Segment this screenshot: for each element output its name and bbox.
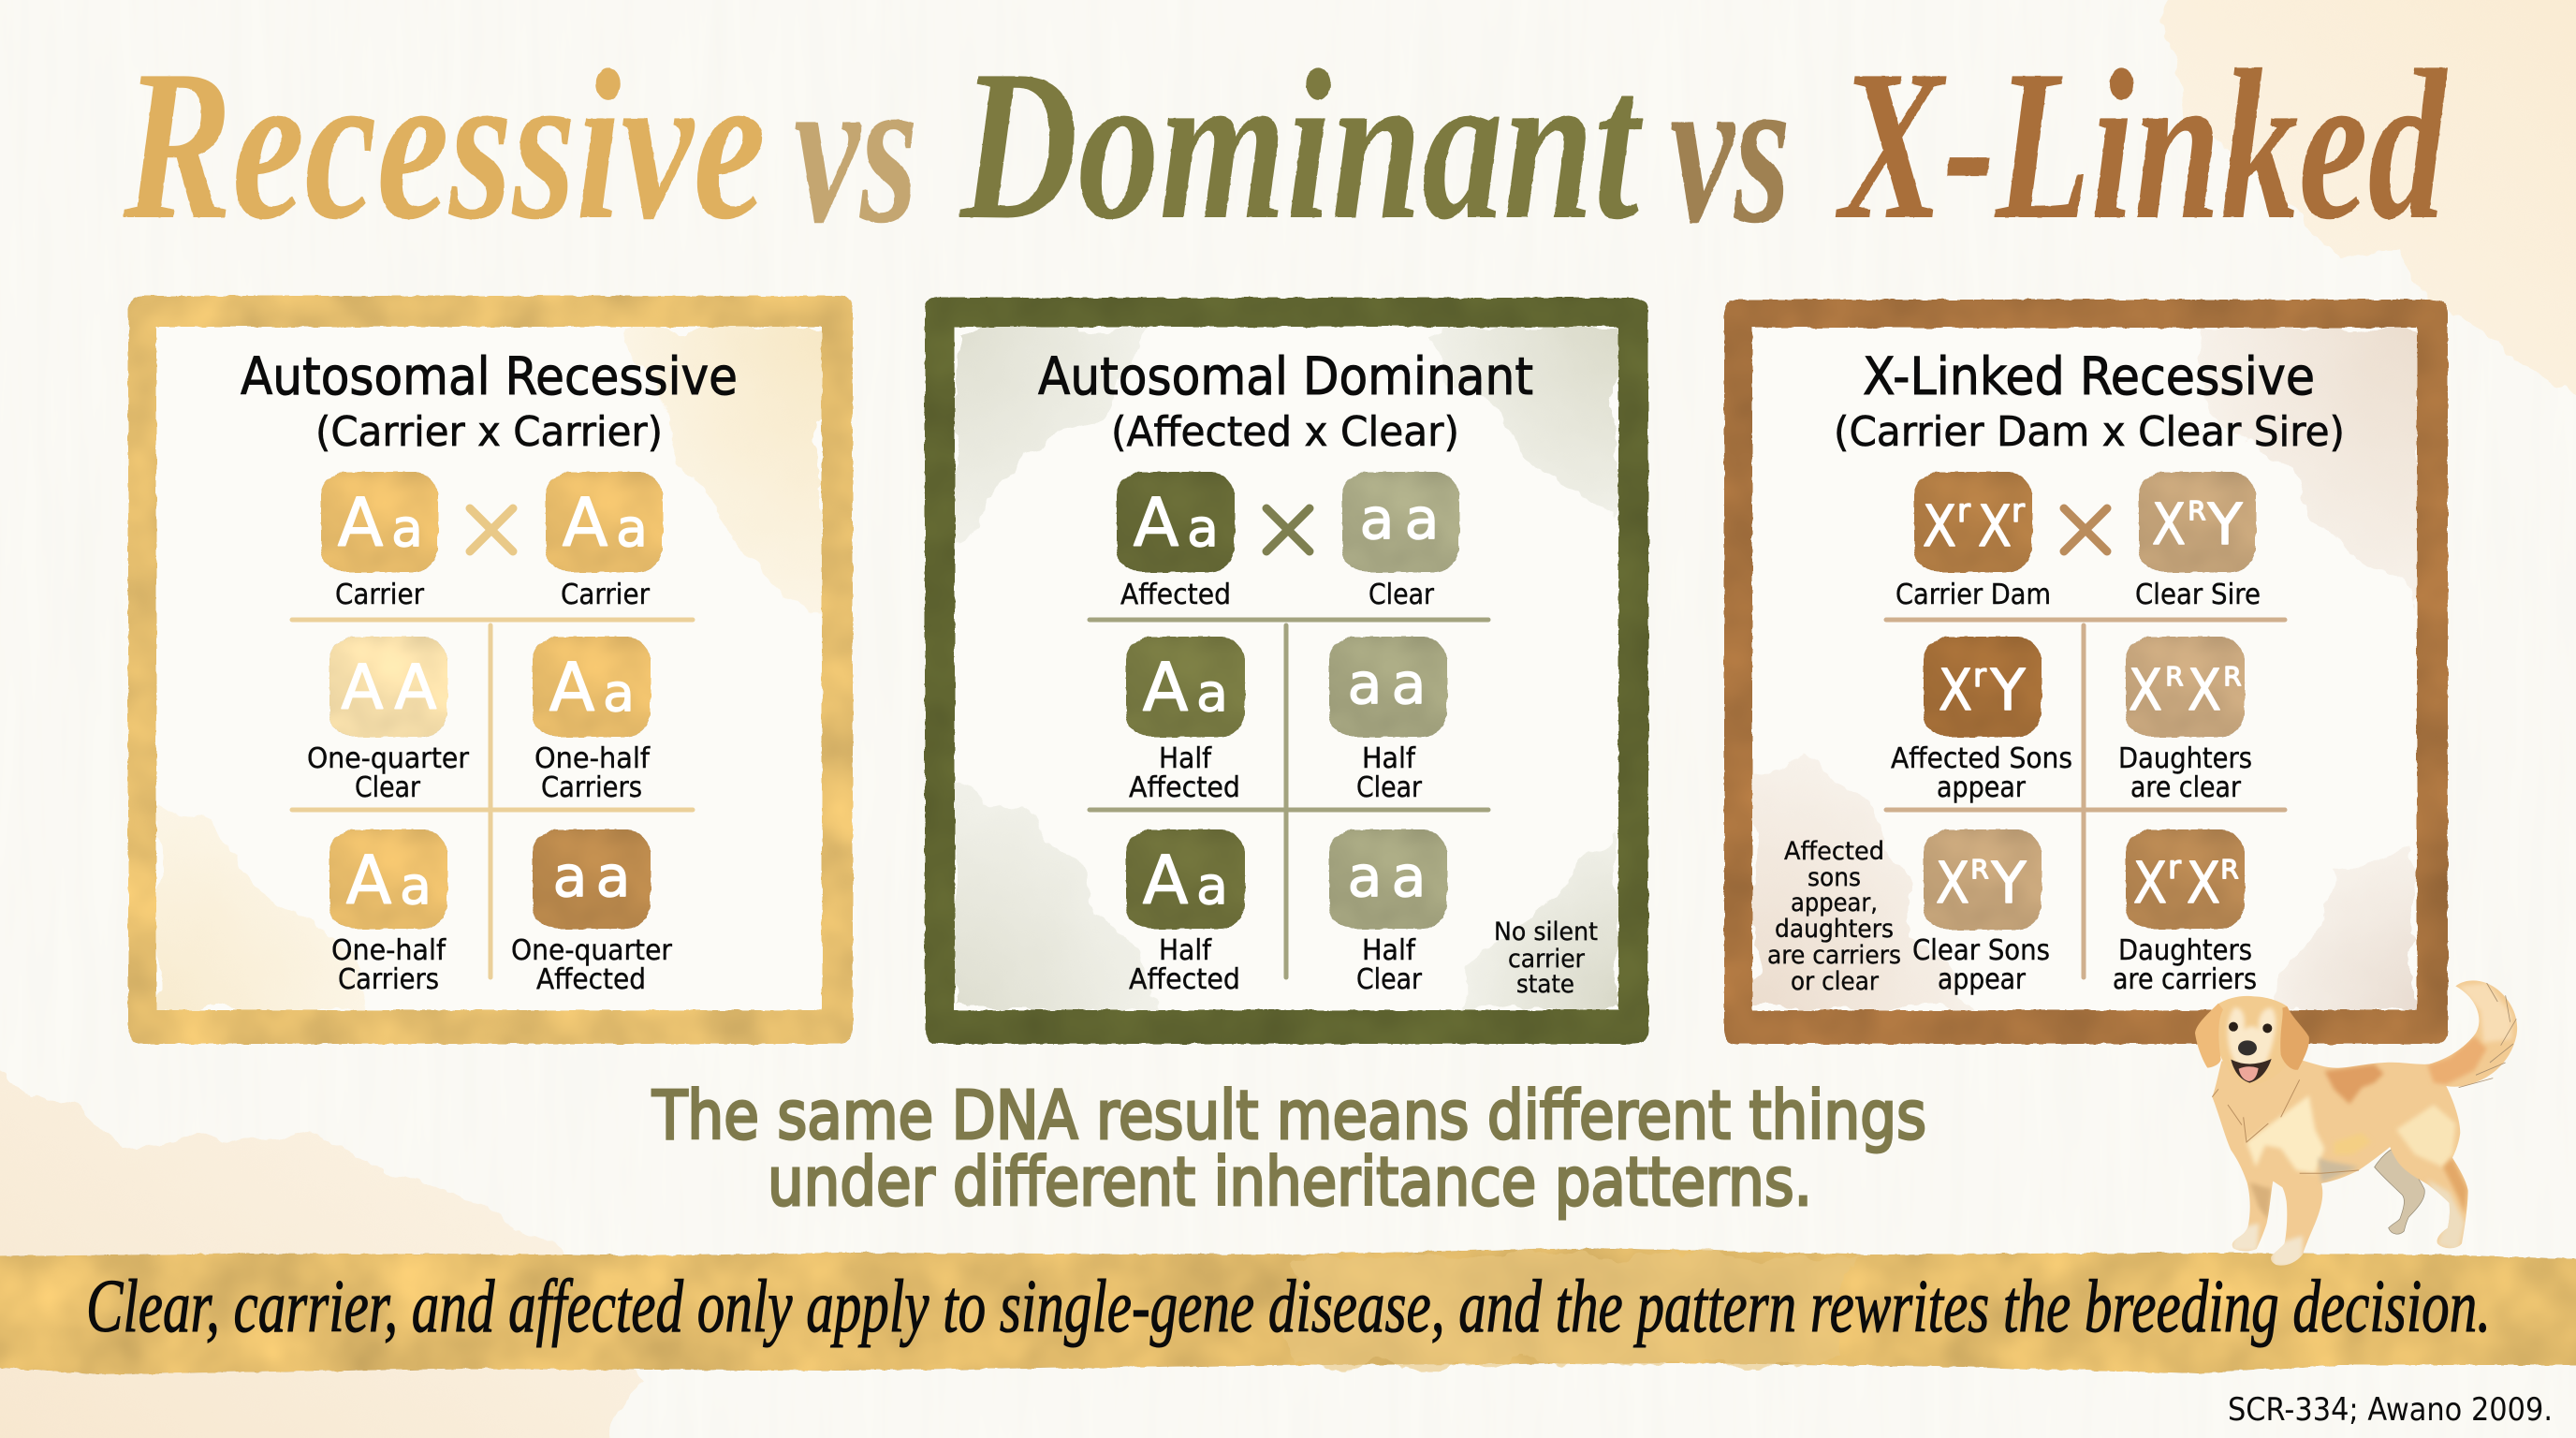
watercolour wash: bottom left [0, 1053, 637, 1438]
label: clear: Clear [1368, 579, 1435, 611]
tile: AA: A [394, 652, 437, 724]
label: carrier: Carrier [561, 579, 651, 611]
label: clear sire: Clear Sire [2135, 579, 2261, 611]
heading: Autosomal Recessive [241, 346, 738, 406]
heading: X-Linked Recessive [1863, 346, 2315, 406]
subheading: (Carrier x Carrier) [315, 408, 663, 456]
tile: parent XrXr: X [1978, 493, 2012, 560]
label: affected sons appear [1891, 742, 2072, 804]
right ear [2280, 1006, 2309, 1070]
tile: parent XRY: Y [2206, 492, 2243, 558]
panel: autosomal dominant [925, 298, 1648, 1044]
chest fur lines [2212, 1079, 2359, 1173]
tile: XrY [1924, 637, 2042, 737]
label: one-quarter affected: Affected [536, 963, 646, 996]
tile: Aa: A [1143, 842, 1188, 919]
title [123, 25, 2448, 268]
label: one-quarter affected: One-quarter [511, 934, 673, 967]
note: no silent carrier state: No silent [1494, 917, 1598, 946]
note: affected sons appear, daughters are carriers or clear: daughters [1775, 915, 1894, 944]
tile: Aa: a [1196, 856, 1228, 916]
tile: Aa: A [1143, 649, 1188, 726]
label: half clear: Clear [1356, 771, 1423, 804]
tile: XRXR: X [2188, 657, 2221, 724]
rump cream [2396, 1105, 2455, 1167]
label: half affected: Half [1159, 934, 1212, 967]
panel wash tints [156, 327, 822, 1010]
tile: XrY: r [1973, 657, 1986, 695]
tile: Aa [329, 829, 447, 929]
mouth [2231, 1059, 2272, 1083]
icon: cross [1266, 508, 1310, 551]
nose [2238, 1040, 2257, 1055]
subheading: (Carrier Dam x Clear Sire) [1834, 408, 2345, 456]
label: one-half carriers: Carriers [338, 963, 439, 996]
far hind leg [2375, 1149, 2424, 1234]
panel: autosomal recessive [128, 296, 853, 1044]
tile: XRXR [2126, 637, 2245, 737]
belly shadow [2319, 1158, 2359, 1182]
tile: Aa: A [549, 649, 594, 726]
tile: XrXR: r [2168, 849, 2181, 887]
label: daughters are clear [2118, 742, 2252, 804]
label: one-quarter affected [511, 934, 673, 996]
panel: x-linked recessive [1724, 300, 2448, 1044]
tile: parent Aa: a [1187, 498, 1219, 558]
label: one-half carriers [331, 934, 446, 996]
tile: Aa: A [346, 842, 391, 919]
icon: golden retriever [2195, 980, 2517, 1267]
head [2216, 996, 2296, 1086]
eyes [2229, 1022, 2272, 1033]
note: affected sons appear, daughters are carriers or clear [1767, 837, 1901, 996]
label: half affected [1129, 742, 1240, 804]
label: one-quarter clear [307, 742, 470, 804]
icon: cross [2064, 508, 2107, 551]
tail feather strokes [2459, 983, 2516, 1088]
belly glow [2334, 1133, 2371, 1154]
label: daughters are carriers: Daughters [2118, 934, 2252, 967]
tile: Aa [533, 637, 651, 737]
label: affected sons appear: Affected Sons [1891, 742, 2072, 775]
label: carrier: Carrier [335, 579, 425, 611]
frame [128, 296, 853, 1044]
label: half clear [1356, 934, 1423, 996]
subheading: (Affected x Clear) [1111, 408, 1459, 456]
tile: Aa [1126, 637, 1245, 737]
tile: aa [533, 829, 651, 929]
punnett grid lines [1090, 620, 1488, 977]
bottom banner band [0, 1248, 2576, 1374]
note: affected sons appear, daughters are carriers or clear: Affected [1784, 837, 1884, 866]
label: half clear: Half [1362, 742, 1416, 775]
note: affected sons appear, daughters are carriers or clear: are carriers [1767, 941, 1901, 970]
tile: aa: a [1392, 652, 1426, 717]
title: Recessive [123, 25, 766, 264]
tile: parent aa: a [1405, 487, 1439, 552]
tile: XRXR: X [2129, 657, 2162, 724]
heading: Autosomal Dominant [1038, 346, 1533, 406]
tile: parent XrXr: X [1923, 493, 1956, 560]
watercolour wash: top right [2162, 0, 2576, 412]
label: carrier dam: Carrier Dam [1895, 579, 2051, 611]
label: half clear [1356, 742, 1423, 804]
statement: same dna result [651, 1077, 1926, 1221]
title: Dominant [959, 25, 1644, 264]
frame [1724, 300, 2448, 1044]
tile: parent Aa: a [616, 498, 648, 558]
tile: AA [329, 637, 447, 737]
tile: parent XRY [2139, 472, 2256, 572]
tail shading [2427, 1036, 2487, 1084]
tile: XrY: X [1939, 657, 1972, 724]
tile: XRXR: R [2165, 661, 2184, 692]
label: half clear: Half [1362, 934, 1416, 967]
body colour patches [2231, 983, 2511, 1267]
panel wash tints [1752, 328, 2417, 1010]
label: clear sons appear: appear [1938, 963, 2027, 996]
tile: Aa: a [603, 663, 635, 723]
statement: same dna result: The same DNA result means different things [651, 1077, 1926, 1154]
label: affected sons appear: appear [1937, 771, 2027, 804]
tongue [2239, 1066, 2259, 1081]
note: no silent carrier state: carrier [1508, 945, 1586, 974]
left ear [2195, 1004, 2223, 1068]
tile: parent XRY: X [2152, 492, 2186, 558]
front paws pale [2231, 1224, 2303, 1267]
tile: parent Aa: A [563, 484, 607, 562]
tile: XRY: Y [1990, 850, 2027, 917]
body [2212, 980, 2517, 1266]
tile: parent aa [1342, 472, 1459, 572]
label: one-half carriers: Carriers [541, 771, 642, 804]
label: daughters are clear: are clear [2130, 771, 2242, 804]
tile: parent Aa [321, 472, 438, 572]
title: vs [794, 29, 918, 268]
tile: XRY: R [1970, 854, 1989, 885]
tile: parent XrXr: r [2012, 492, 2025, 530]
hind leg pale [2427, 1180, 2465, 1252]
tile: parent XrXr [1914, 472, 2032, 572]
tile: XRY [1924, 829, 2042, 930]
tile: Aa [1126, 829, 1245, 929]
tile: parent Aa [546, 472, 663, 572]
tile: XrXR: X [2133, 850, 2167, 917]
tile: parent aa: a [1360, 487, 1394, 552]
tile: aa [1329, 637, 1447, 737]
tile: aa: a [553, 844, 587, 910]
tile: parent Aa [1117, 472, 1235, 572]
icon: cross [470, 508, 513, 551]
label: daughters are clear: Daughters [2118, 742, 2252, 775]
head highlight [2228, 1007, 2276, 1072]
label: daughters are carriers: are carriers [2113, 963, 2257, 996]
note: affected sons appear, daughters are carriers or clear: sons [1808, 863, 1861, 892]
note: no silent carrier state: state [1516, 970, 1574, 999]
tile: aa: a [596, 844, 630, 910]
note: affected sons appear, daughters are carriers or clear: appear, [1791, 888, 1878, 917]
label: half affected: Affected [1129, 963, 1240, 996]
tile: XrXR: R [2220, 854, 2239, 885]
label: half clear: Clear [1356, 963, 1423, 996]
tile: XRY: X [1936, 850, 1969, 917]
label: affected: Affected [1120, 579, 1231, 611]
back patch [2324, 1064, 2384, 1104]
tile: XrY: Y [1989, 657, 2026, 724]
label: one-half carriers: One-half [534, 742, 651, 775]
title: vs [1670, 29, 1791, 268]
tile: parent Aa: A [338, 484, 383, 562]
tile: parent Aa: A [1134, 484, 1178, 562]
label: one-half carriers [534, 742, 651, 804]
banner lighter wash [1288, 1253, 1863, 1365]
label: half affected: Half [1159, 742, 1212, 775]
tile: parent Aa: a [391, 498, 423, 558]
label: one-quarter clear: Clear [355, 771, 421, 804]
tile: Aa: a [1196, 663, 1228, 723]
statement: same dna result: under different inheritance patterns. [768, 1143, 1812, 1221]
note: affected sons appear, daughters are carriers or clear: or clear [1791, 967, 1880, 996]
label: clear sons appear: Clear Sons [1912, 934, 2050, 967]
tile: aa: a [1392, 844, 1426, 910]
frame [925, 298, 1648, 1044]
note: no silent carrier state [1494, 917, 1598, 999]
label: one-half carriers: One-half [331, 934, 446, 967]
tile: XrXR [2126, 829, 2245, 929]
tile: aa: a [1348, 652, 1382, 717]
punnett grid lines [292, 620, 693, 977]
hind leg shading [2443, 1158, 2467, 1214]
tail tip light [2459, 983, 2511, 1042]
tile: parent XRY: R [2188, 495, 2206, 526]
tile: aa [1329, 829, 1447, 929]
tile: XRXR: R [2223, 661, 2242, 692]
label: one-quarter clear: One-quarter [307, 742, 470, 775]
tile: AA: A [341, 652, 384, 724]
label: half affected [1129, 934, 1240, 996]
tile: aa: a [1348, 844, 1382, 910]
front leg shading [2249, 1182, 2272, 1220]
label: half affected: Affected [1129, 771, 1240, 804]
tile: Aa: a [400, 856, 432, 916]
panel wash tints [955, 327, 1618, 1010]
label: clear sons appear [1912, 934, 2050, 996]
punnett grid lines [1886, 620, 2285, 977]
tile: XrXR: X [2187, 850, 2220, 917]
chest cream [2247, 1095, 2324, 1173]
tile: parent XrXr: r [1957, 492, 1970, 530]
label: daughters are carriers [2113, 934, 2257, 996]
